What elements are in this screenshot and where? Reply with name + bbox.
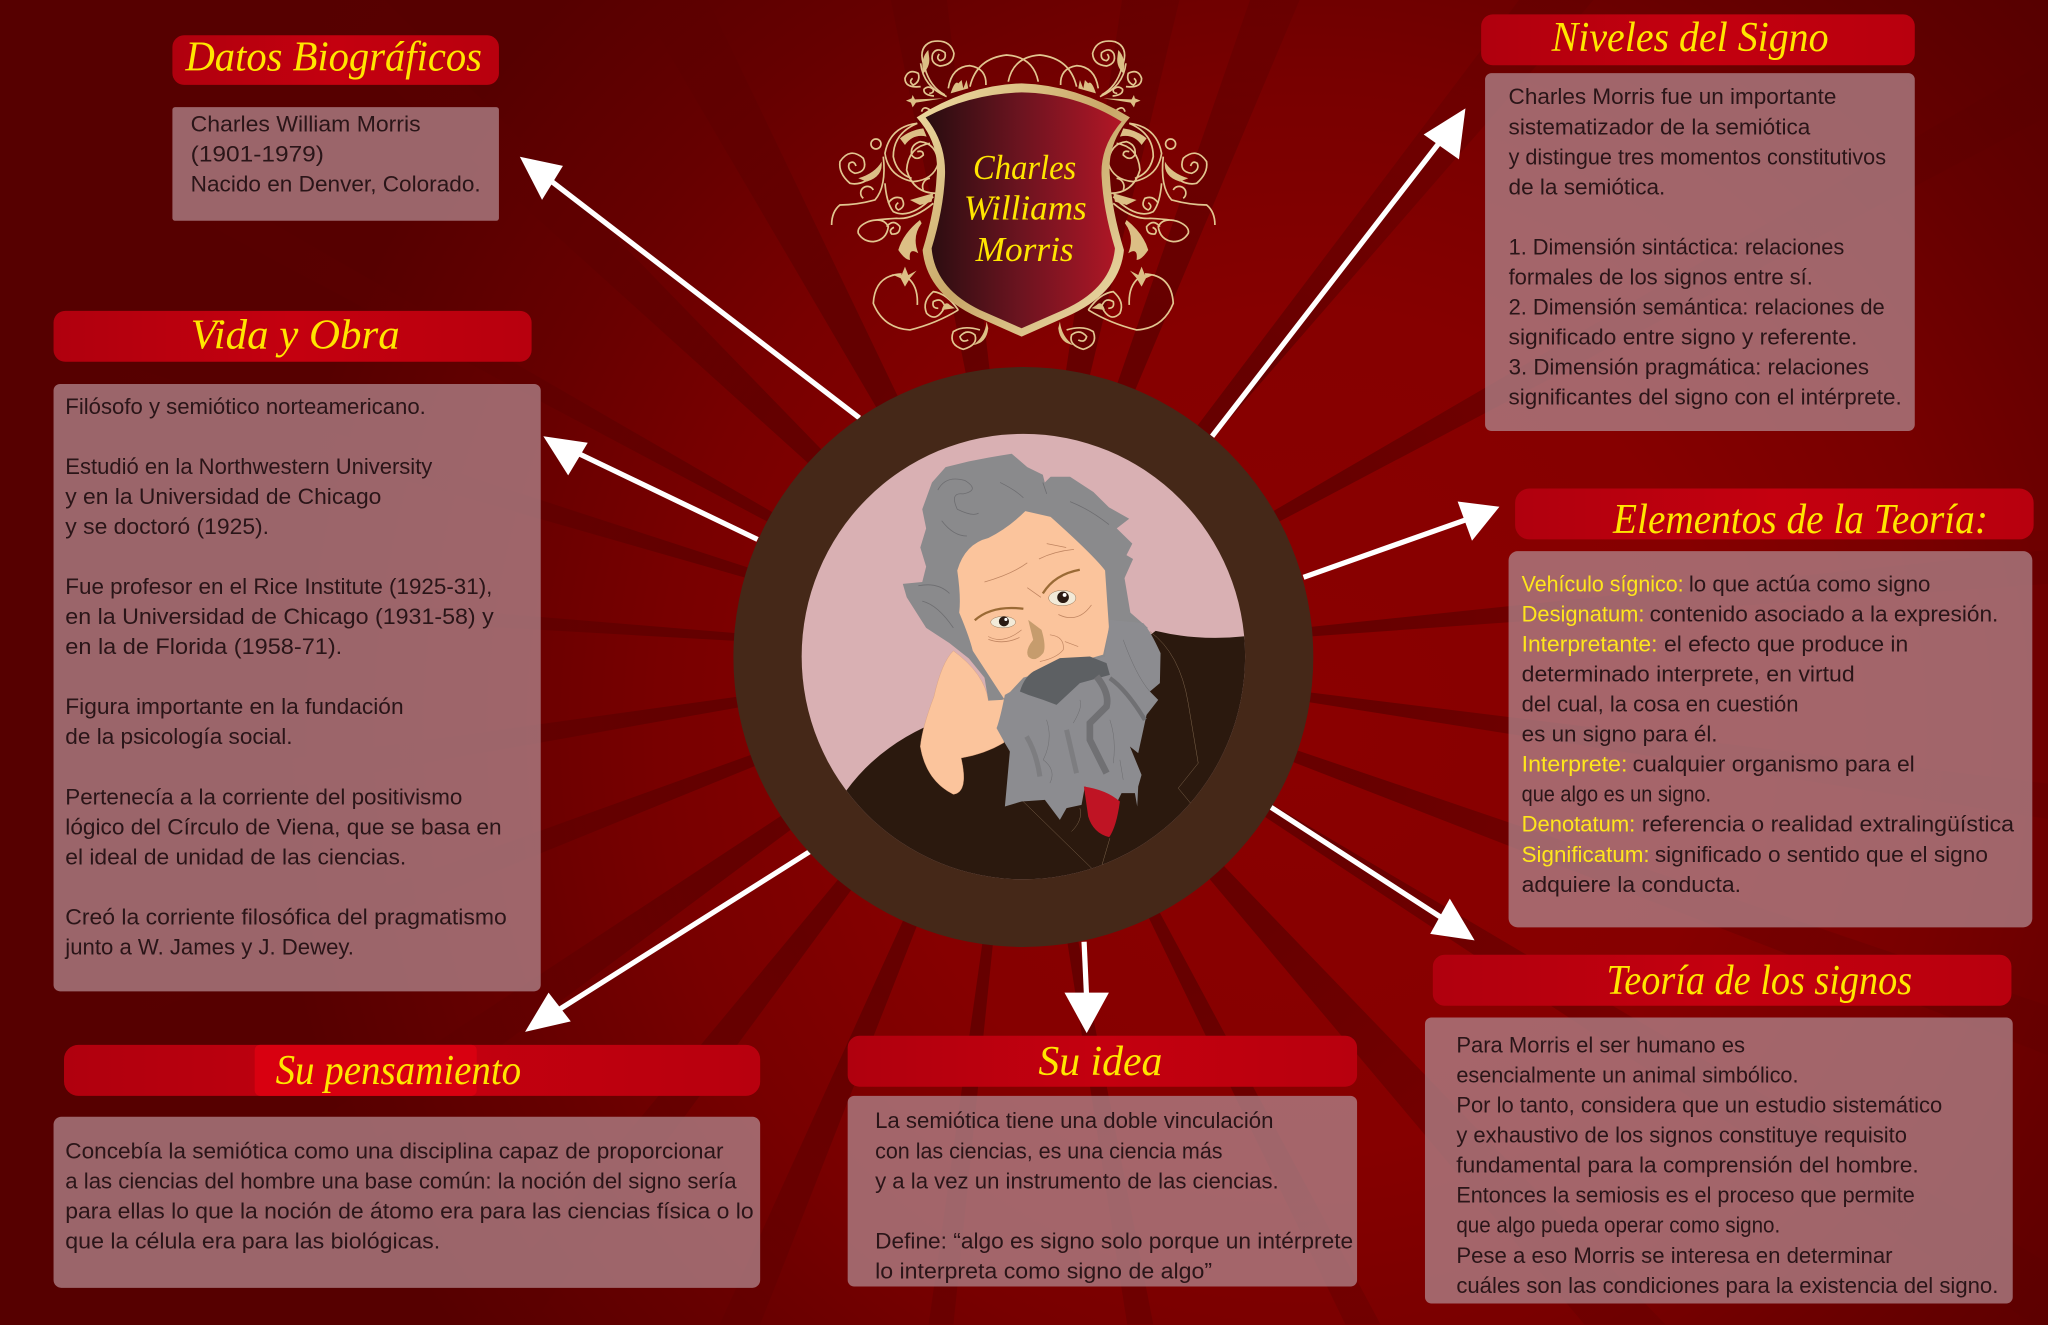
text block: his idea: Define: “algo es signo solo porque un intérprete — [875, 1228, 1353, 1253]
text block: theory of signs: Entonces la semiosis es el proceso que permite — [1456, 1183, 1915, 1208]
heading: Su pensamiento — [64, 1045, 760, 1096]
text block: life and work: Creó la corriente filosófica del pragmatismo — [65, 904, 507, 929]
text block: life and work — [54, 384, 541, 991]
heading: Niveles del Signo: Niveles del Signo — [1551, 15, 1829, 61]
panel: Elementos de la Teoría — [1509, 488, 2034, 927]
text block: sign levels: 3. Dimensión pragmática: relaciones — [1509, 355, 1869, 380]
portrait background disc — [802, 434, 1245, 879]
heading: Elementos de la Teoría — [1515, 488, 2034, 543]
arrow: to Niveles del Signo — [1212, 108, 1465, 436]
text block: theory elements: significado o sentido que el signo — [1655, 842, 1988, 867]
text block: his idea: lo interpreta como signo de algo” — [875, 1258, 1212, 1283]
heading: Vida y Obra — [54, 311, 532, 362]
text block: theory elements: adquiere la conducta. — [1522, 872, 1741, 897]
text block: sign levels: sistematizador de la semiótica — [1509, 114, 1811, 139]
text block: sign levels: Charles Morris fue un importante — [1509, 84, 1836, 109]
text block: theory elements: Denotatum: — [1522, 812, 1635, 837]
text block: sign levels: significado entre signo y referente. — [1509, 325, 1857, 350]
shield name text: Williams — [964, 188, 1087, 227]
text block: life and work: en la Universidad de Chicago (1931-58) y — [65, 604, 495, 629]
text block: his thought — [54, 1117, 760, 1288]
text block: theory elements: cualquier organismo para el — [1633, 752, 1915, 777]
text block: theory elements — [1509, 551, 2032, 927]
text block: theory of signs — [1425, 1017, 2013, 1304]
arrow: to Vida y Obra — [543, 436, 758, 539]
panel: Teoría de los signos — [1425, 955, 2013, 1304]
heading: Teoría de los signos: Teoría de los signos — [1607, 958, 1912, 1004]
shield name text: Charles — [973, 148, 1076, 187]
heading: Datos Biográficos: Datos Biográficos — [184, 35, 482, 81]
text block: life and work: Filósofo y semiótico norteamericano. — [65, 394, 426, 419]
text block: theory elements: que algo es un signo. — [1522, 782, 1711, 807]
arrows from portrait — [520, 108, 1499, 1033]
text block: theory elements: Significatum: — [1522, 842, 1650, 867]
text block: theory elements: el efecto que produce in — [1664, 631, 1908, 656]
text block: his thought: para ellas lo que la noción de átomo era para las ciencias física o lo — [65, 1198, 754, 1223]
text block: biographical data: Charles William Morris — [191, 112, 421, 137]
text block: his idea — [848, 1096, 1357, 1287]
text block: his idea: con las ciencias, es una ciencia más — [875, 1138, 1223, 1163]
heading: Teoría de los signos — [1433, 955, 2011, 1006]
text block: theory of signs: esencialmente un animal simbólico. — [1456, 1063, 1799, 1088]
text block: biographical data: (1901-1979) — [191, 142, 324, 167]
text block: life and work: el ideal de unidad de las ciencias. — [65, 844, 406, 869]
text block: theory elements: determinado interprete, en virtud — [1522, 662, 1855, 687]
heading: Vida y Obra: Vida y Obra — [191, 313, 400, 359]
text block: sign levels: 1. Dimensión sintáctica: relaciones — [1509, 234, 1844, 259]
arrow: to Su pensamiento — [525, 852, 810, 1032]
panel: Su pensamiento — [54, 1045, 760, 1288]
portrait medallion — [733, 367, 1313, 947]
emblem: golden shield with name — [832, 41, 1215, 349]
text block: sign levels: significantes del signo con el intérprete. — [1509, 385, 1902, 410]
text block: his idea: y a la vez un instrumento de las ciencias. — [875, 1168, 1279, 1193]
shield frame — [917, 83, 1130, 337]
text block: his idea: La semiótica tiene una doble vinculación — [875, 1108, 1273, 1133]
arrow: to Elementos de la Teoría — [1304, 502, 1499, 577]
text block: sign levels — [1485, 73, 1915, 431]
text block: theory elements: lo que actúa como signo — [1689, 571, 1930, 596]
text block: theory elements: del cual, la cosa en cuestión — [1522, 692, 1799, 717]
ornament: gold flourishes — [832, 41, 1215, 349]
text block: sign levels: y distingue tres momentos constitutivos — [1509, 144, 1886, 169]
heading: Su idea: Su idea — [1038, 1039, 1162, 1085]
shield name text — [964, 148, 1087, 269]
text block: theory elements: es un signo para él. — [1522, 722, 1718, 747]
text block: sign levels: 2. Dimensión semántica: relaciones de — [1509, 295, 1885, 320]
shield name text: Morris — [975, 230, 1074, 269]
panel: Niveles del Signo — [1481, 14, 1915, 431]
panel: Vida y Obra — [54, 311, 541, 991]
text block: life and work: y se doctoró (1925). — [65, 514, 269, 539]
text block: his thought: que la célula era para las biológicas. — [65, 1228, 440, 1253]
text block: life and work: de la psicología social. — [65, 724, 293, 749]
text block: life and work: Fue profesor en el Rice Institute (1925-31), — [65, 574, 492, 599]
shield interior — [926, 92, 1122, 328]
text block: life and work: junto a W. James y J. Dewey. — [64, 935, 354, 960]
text block: theory of signs: cuáles son las condiciones para la existencia del signo. — [1456, 1273, 1998, 1298]
text block: his thought: Concebía la semiótica como una disciplina capaz de proporcionar — [65, 1138, 724, 1163]
arrow: to Datos Biográficos — [520, 157, 859, 418]
text block: theory of signs: Para Morris el ser humano es — [1456, 1032, 1745, 1057]
arrow: to Teoría de los signos — [1271, 807, 1475, 940]
text block: life and work: Estudió en la Northwestern University — [65, 454, 433, 479]
heading: Su pensamiento: Su pensamiento — [276, 1048, 521, 1094]
heading: Su idea — [848, 1036, 1357, 1087]
text block: theory of signs: Por lo tanto, considera que un estudio sistemático — [1456, 1093, 1942, 1118]
text block: biographical data — [172, 107, 499, 221]
text block: theory elements: Interprete: — [1522, 752, 1627, 777]
text block: sign levels: de la semiótica. — [1509, 174, 1665, 199]
heading: Elementos de la Teoría: Elementos de la Teoría: — [1612, 497, 1988, 543]
text block: theory elements: Vehículo sígnico: — [1522, 571, 1684, 596]
panel: Datos Biográficos — [172, 35, 499, 221]
text block: life and work: Figura importante en la fundación — [65, 694, 404, 719]
text block: theory elements: referencia o realidad extralingüística — [1642, 812, 2015, 837]
text block: his thought: a las ciencias del hombre una base común: la noción del signo sería — [65, 1168, 737, 1193]
text block: theory elements: Interpretante: — [1522, 631, 1657, 656]
text block: life and work: Pertenecía a la corriente del positivismo — [65, 784, 462, 809]
text block: theory elements: contenido asociado a la expresión. — [1650, 601, 1998, 626]
text block: life and work: y en la Universidad de Chicago — [65, 484, 381, 509]
text block: theory of signs: y exhaustivo de los signos constituye requisito — [1456, 1123, 1907, 1148]
text block: life and work: en la de Florida (1958-71). — [65, 634, 342, 659]
heading: Niveles del Signo — [1481, 14, 1915, 65]
panel: Su idea — [848, 1036, 1357, 1287]
text block: life and work: lógico del Círculo de Viena, que se basa en — [65, 814, 502, 839]
text block: biographical data: Nacido en Denver, Colorado. — [191, 172, 481, 197]
text block: theory elements: Designatum: — [1522, 601, 1644, 626]
text block: sign levels: formales de los signos entre sí. — [1509, 264, 1813, 289]
arrow: to Su idea — [1064, 942, 1109, 1033]
portrait illustration — [837, 454, 1249, 880]
text block: theory of signs: Pese a eso Morris se interesa en determinar — [1456, 1243, 1893, 1268]
text block: theory of signs: fundamental para la comprensión del hombre. — [1456, 1153, 1919, 1178]
text block: theory of signs: que algo pueda operar como signo. — [1456, 1213, 1780, 1238]
